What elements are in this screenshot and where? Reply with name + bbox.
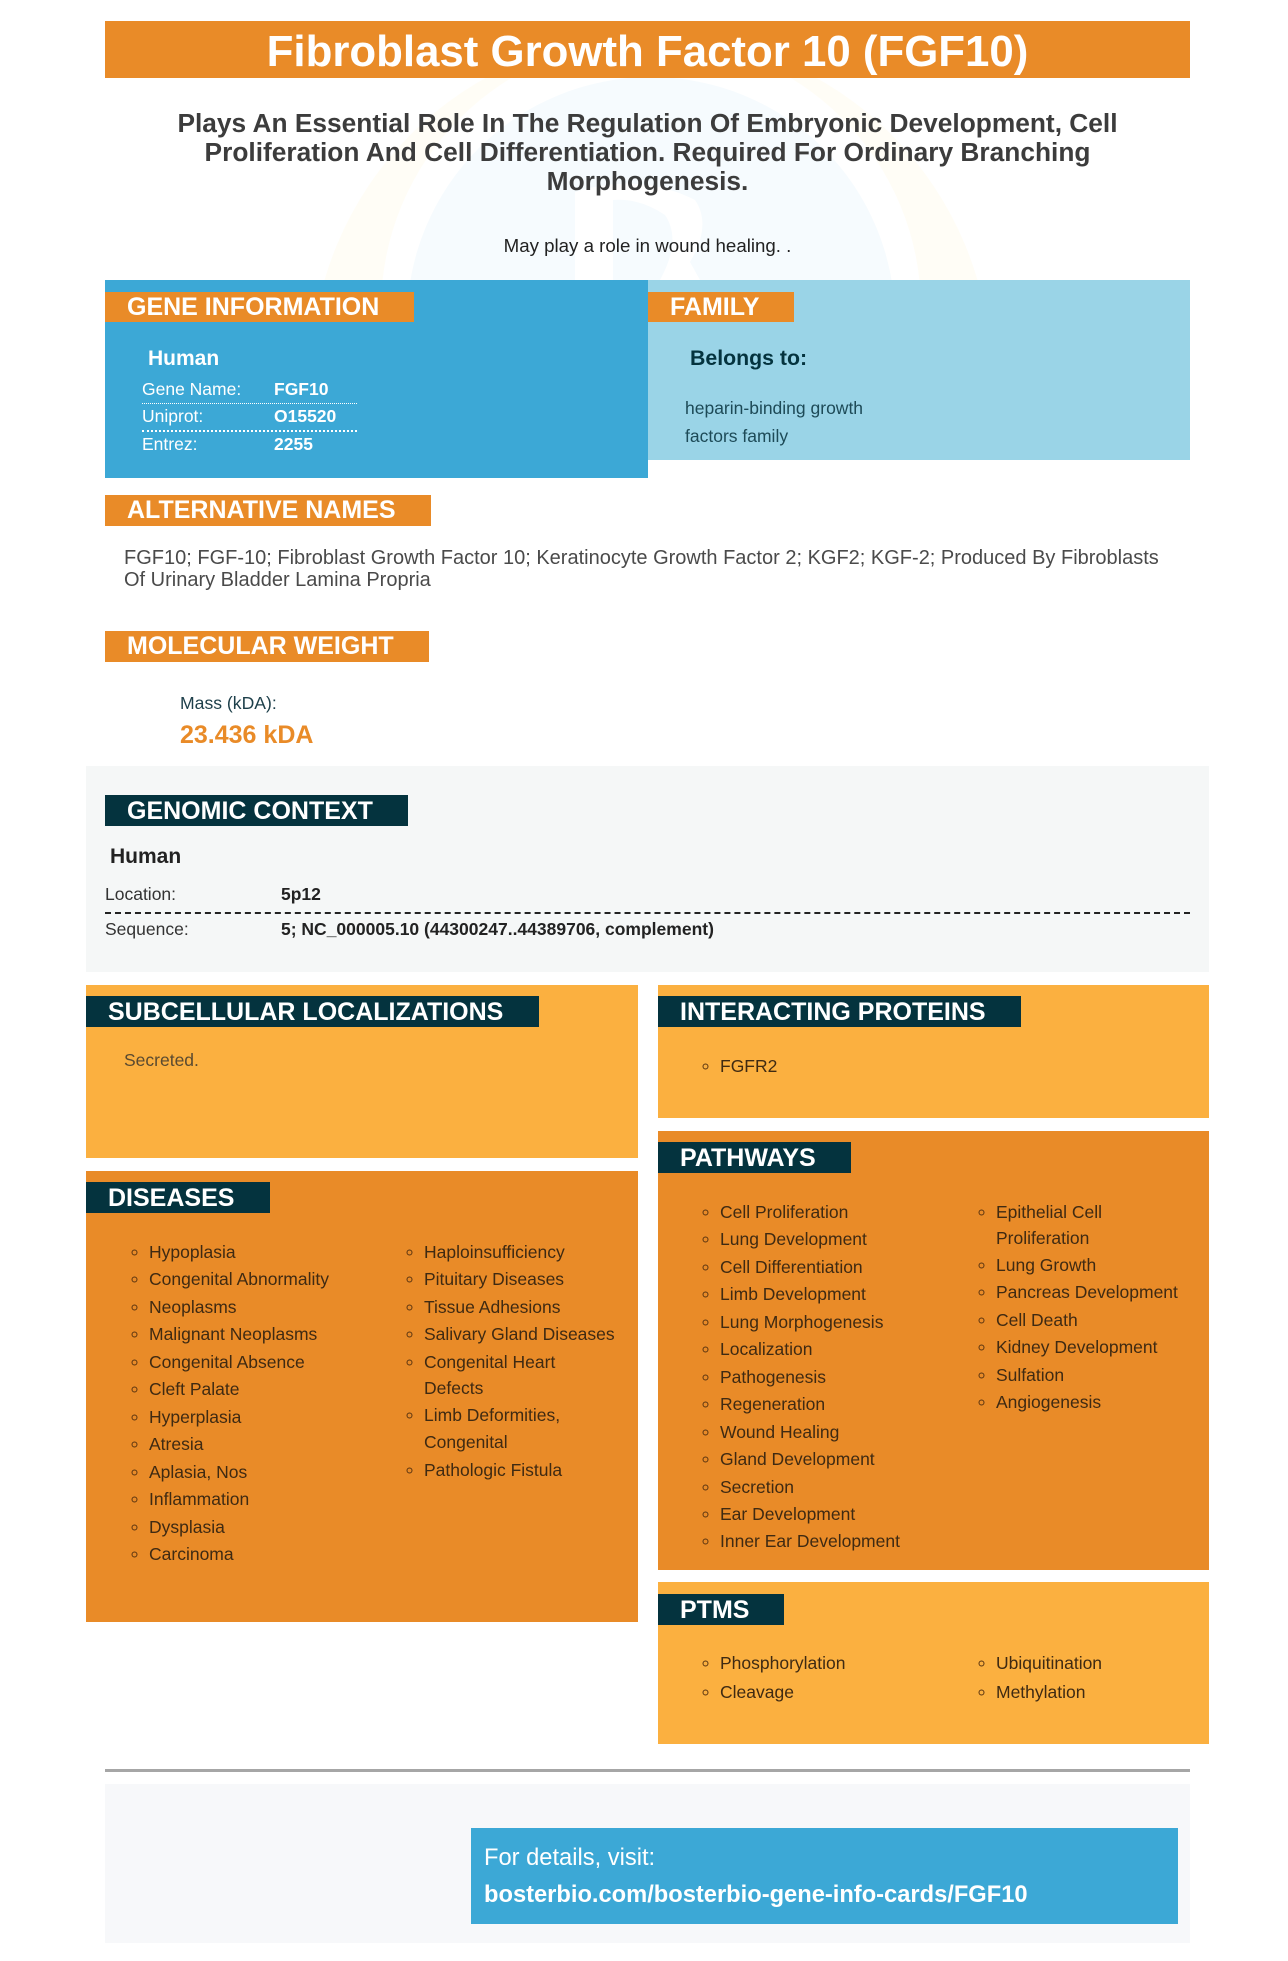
panel: pathways: [658, 1131, 1209, 1570]
alternative names text: FGF10; FGF-10; Fibroblast Growth Factor 10; Keratinocyte Growth Factor 2; KGF2; KGF-2; Produced By Fibroblasts: [124, 547, 1159, 569]
disease list left: Hypoplasia: [149, 1242, 236, 1262]
pathway list right: Kidney Development: [996, 1337, 1157, 1357]
panel: subcellular localizations: [86, 985, 638, 1158]
disease list left: Dysplasia: [149, 1517, 225, 1537]
gene details table: FGF10: [274, 379, 328, 399]
disease list left: Malignant Neoplasms: [149, 1324, 317, 1344]
heading: diseases: DISEASES: [108, 1184, 234, 1212]
gene details table: Entrez:: [142, 434, 197, 454]
ptm list left: Cleavage: [720, 1682, 794, 1702]
pathway list right: [978, 1202, 1178, 1412]
heading: gene information: GENE INFORMATION: [127, 293, 379, 321]
pathway list right: Pancreas Development: [996, 1282, 1178, 1302]
family text: factors family: [685, 426, 788, 446]
heading: ptms: [658, 1594, 784, 1625]
species label: Human: [110, 845, 181, 868]
location value: 5p12: [281, 884, 321, 904]
pathway list left: [702, 1202, 900, 1551]
heading: pathways: [658, 1142, 851, 1173]
disease list left: Atresia: [149, 1434, 203, 1454]
disease list left: Hyperplasia: [149, 1407, 241, 1427]
ptm list left: [702, 1653, 846, 1702]
panel: genomic context: [86, 766, 1209, 972]
gene details table: [142, 379, 357, 454]
pathway list left: Cell Proliferation: [720, 1202, 848, 1222]
disease list left: Congenital Absence: [149, 1352, 305, 1372]
heading: family: [648, 292, 794, 322]
mass value: 23.436 kDA: [180, 721, 313, 749]
panel: gene information: [105, 280, 648, 478]
panel: diseases: [86, 1171, 638, 1622]
gene details table: 2255: [274, 434, 313, 454]
disease list right: [406, 1242, 615, 1480]
panel: family: [648, 280, 1190, 460]
sequence value: 5; NC_000005.10 (44300247..44389706, complement): [281, 919, 714, 939]
location row: Location:: [105, 884, 176, 904]
pathway list left: Limb Development: [720, 1284, 866, 1304]
heading: genomic context: GENOMIC CONTEXT: [127, 797, 373, 825]
heading: interacting proteins: INTERACTING PROTEINS: [680, 998, 986, 1026]
pathway list left: Wound Healing: [720, 1422, 839, 1442]
disease list left: Congenital Abnormality: [149, 1269, 329, 1289]
mass label: Mass (kDA):: [180, 693, 277, 713]
disease list right: Salivary Gland Diseases: [424, 1324, 615, 1344]
disease list right: Congenital: [424, 1432, 508, 1452]
pathway list left: Regeneration: [720, 1394, 825, 1414]
disease list right: Pathologic Fistula: [424, 1460, 562, 1480]
protein list: FGFR2: [720, 1056, 777, 1076]
heading: family: FAMILY: [670, 293, 759, 321]
heading: ptms: PTMS: [680, 1596, 749, 1624]
subtitle: Morphogenesis.: [547, 166, 748, 196]
callout url: bosterbio.com/bosterbio-gene-info-cards/FGF10: [484, 1882, 1028, 1908]
subtitle: Proliferation And Cell Differentiation. Required For Ordinary Branching: [205, 137, 1090, 167]
heading: subcellular localizations: SUBCELLULAR LOCALIZATIONS: [108, 998, 503, 1026]
heading: molecular weight: MOLECULAR WEIGHT: [127, 632, 394, 660]
pathway list left: Localization: [720, 1339, 812, 1359]
disease list right: Limb Deformities,: [424, 1405, 560, 1425]
gene details table: O15520: [274, 406, 336, 426]
ptm list right: [978, 1653, 1102, 1702]
pathway list left: Ear Development: [720, 1504, 855, 1524]
disease list right: Tissue Adhesions: [424, 1297, 561, 1317]
title banner: [105, 21, 1190, 78]
pathway list right: Epithelial Cell: [996, 1202, 1102, 1222]
disease list left: [132, 1242, 329, 1564]
pathway list right: Lung Growth: [996, 1255, 1096, 1275]
heading: pathways: PATHWAYS: [680, 1144, 816, 1172]
belongs to label: Belongs to:: [690, 346, 807, 370]
subtitle: Plays An Essential Role In The Regulation Of Embryonic Development, Cell: [177, 108, 1118, 138]
disease list right: Haploinsufficiency: [424, 1242, 565, 1262]
pathway list right: Angiogenesis: [996, 1392, 1101, 1412]
panel: ptms: [658, 1582, 1209, 1744]
callout label: For details, visit:: [484, 1845, 655, 1871]
pathway list left: Lung Morphogenesis: [720, 1312, 883, 1332]
heading: alternative names: ALTERNATIVE NAMES: [127, 496, 396, 524]
disease list left: Carcinoma: [149, 1544, 234, 1564]
disease list right: Congenital Heart: [424, 1352, 555, 1372]
pathway list left: Cell Differentiation: [720, 1257, 863, 1277]
disease list left: Aplasia, Nos: [149, 1462, 247, 1482]
gene details table: Uniprot:: [142, 406, 203, 426]
disease list right: Defects: [424, 1378, 483, 1398]
pathway list right: Sulfation: [996, 1365, 1064, 1385]
pathway list left: Pathogenesis: [720, 1367, 826, 1387]
alternative names text: [124, 547, 1159, 591]
pathway list left: Lung Development: [720, 1229, 867, 1249]
localization text: Secreted.: [124, 1050, 199, 1070]
pathway list left: Gland Development: [720, 1449, 875, 1469]
ptm list left: Phosphorylation: [720, 1653, 846, 1673]
ptm list right: Ubiquitination: [996, 1653, 1102, 1673]
background watermark logo: [325, 78, 977, 280]
family text: heparin-binding growth: [685, 398, 863, 418]
pathway list left: Secretion: [720, 1477, 794, 1497]
gene details table: Gene Name:: [142, 379, 241, 399]
callout: details link: [471, 1828, 1178, 1924]
pathway list right: Cell Death: [996, 1310, 1078, 1330]
function note: May play a role in wound healing. .: [504, 235, 791, 256]
panel: footer: [105, 1784, 1190, 1943]
family text: [685, 398, 863, 446]
pathway list right: Proliferation: [996, 1228, 1089, 1248]
pathway list left: Inner Ear Development: [720, 1531, 900, 1551]
ptm list right: Methylation: [996, 1682, 1086, 1702]
sequence row: Sequence:: [105, 919, 189, 939]
panel: interacting proteins: [658, 985, 1209, 1118]
disease list left: Inflammation: [149, 1489, 249, 1509]
alternative names text: Of Urinary Bladder Lamina Propria: [124, 569, 431, 591]
title banner: Fibroblast Growth Factor 10 (FGF10): [267, 27, 1028, 76]
heading: diseases: [86, 1182, 270, 1213]
species label: Human: [148, 347, 219, 370]
disease list right: Pituitary Diseases: [424, 1269, 564, 1289]
disease list left: Cleft Palate: [149, 1379, 239, 1399]
disease list left: Neoplasms: [149, 1297, 237, 1317]
subtitle: [177, 108, 1118, 196]
